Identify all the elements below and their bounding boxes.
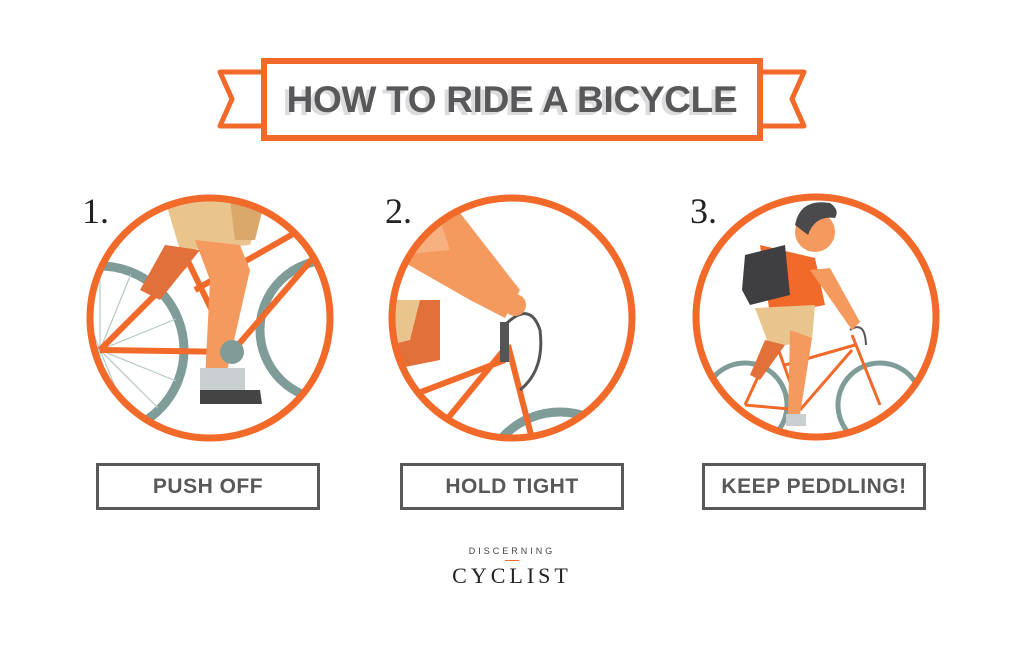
title text: HOW TO RIDE A BICYCLE: [287, 79, 737, 120]
label: hold tight: HOLD TIGHT: [445, 475, 579, 498]
label: hold tight: [400, 463, 624, 510]
logo: discerning cyclist: DISCERNING: [469, 546, 555, 556]
title banner: [218, 58, 806, 141]
step number 1: 1.: [82, 191, 109, 231]
logo: discerning cyclist: CYCLIST: [452, 563, 572, 588]
logo: discerning cyclist: [452, 546, 572, 588]
panel 2: hold tight: [388, 194, 636, 442]
label: keep peddling: [702, 463, 926, 510]
step number 2: 2.: [385, 191, 412, 231]
label: push off: [96, 463, 320, 510]
ribbon tails: [220, 61, 804, 138]
panel 3: keep peddling: [696, 197, 936, 447]
circle illustrations: [86, 194, 940, 442]
label: push off: PUSH OFF: [153, 475, 263, 498]
panel 1: push off: [86, 194, 334, 442]
step number 3: 3.: [690, 191, 717, 231]
label: keep peddling: KEEP PEDDLING!: [721, 475, 907, 498]
